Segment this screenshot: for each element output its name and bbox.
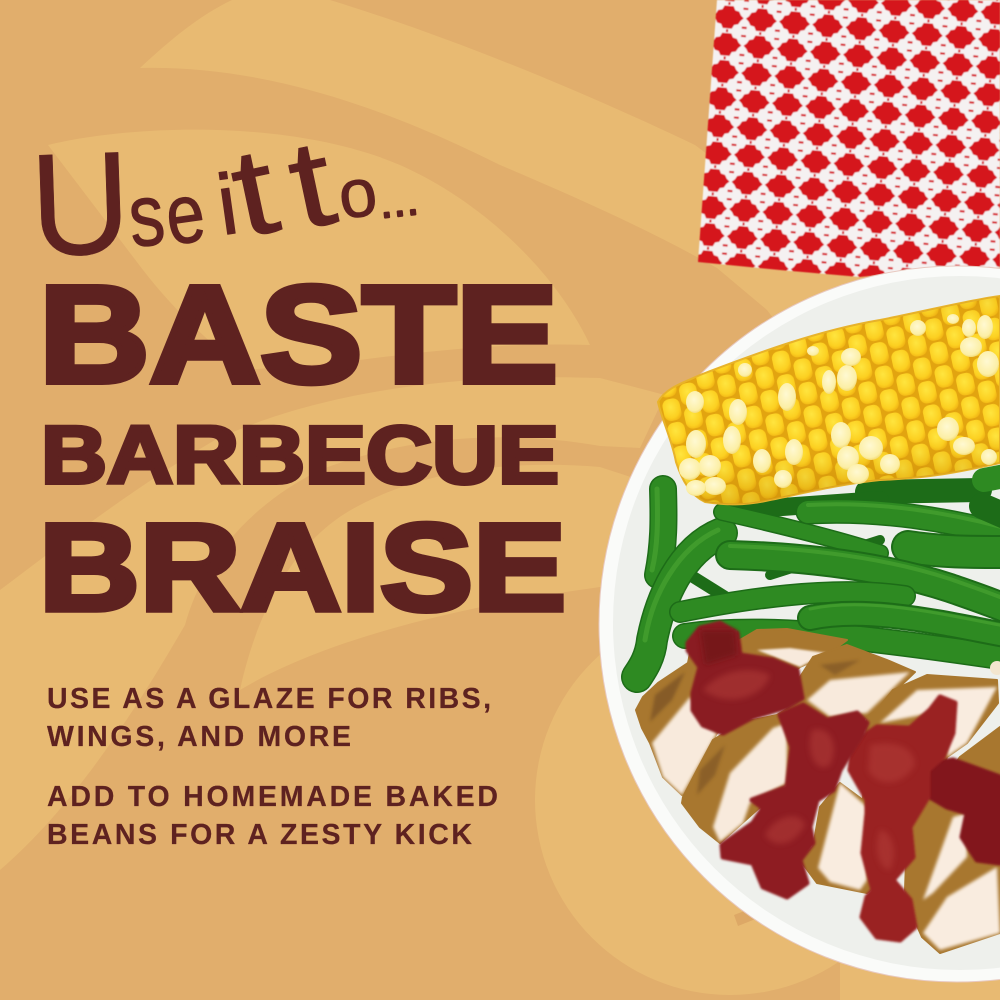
plate (599, 266, 1000, 982)
barbecue sauce (688, 623, 1000, 940)
corn pale kernels (679, 314, 999, 496)
sauce pool center (722, 705, 867, 897)
heading: BASTE: BASTE (39, 258, 558, 412)
towel: red gingham (698, 0, 1000, 277)
heading: Use it to...: t (220, 120, 289, 265)
heading: Use it to...: U (28, 121, 133, 288)
text block: baked beans tip: ADD TO HOMEMADE BAKED (47, 781, 498, 813)
sliced chicken (636, 629, 1000, 953)
green beans (637, 476, 1000, 677)
corn on the cob (658, 296, 1000, 504)
chicken slice 3 (800, 675, 998, 893)
heading: Use it to...: o (334, 153, 382, 234)
heading: Use it to...: e (159, 165, 211, 263)
sauce pool right (928, 760, 1000, 863)
small background wedge (734, 908, 758, 926)
text block: glaze tip: USE AS A GLAZE FOR RIBS, (47, 683, 491, 715)
chicken slice 4 (905, 727, 1000, 953)
text block: baked beans tip: BEANS FOR A ZESTY KICK (47, 819, 472, 851)
text block: glaze tip: WINGS, AND MORE (47, 721, 351, 753)
text block: baked beans tip (47, 781, 498, 851)
heading: Use it to...: i (211, 156, 244, 254)
heading: BRAISE: BRAISE (39, 499, 566, 637)
heading: Use it to... (28, 112, 422, 288)
heading: Use it to...: s (124, 164, 169, 266)
chicken slice 1 (636, 629, 847, 795)
heading: Use it to...: t (277, 112, 346, 257)
sauce pool center right (850, 697, 955, 940)
sauce pool left (688, 623, 802, 733)
heading: Use it to...: ... (377, 175, 422, 228)
heading: BARBECUE: BARBECUE (41, 410, 559, 501)
chicken slice 2 (682, 645, 915, 843)
text block: glaze tip (47, 683, 491, 753)
